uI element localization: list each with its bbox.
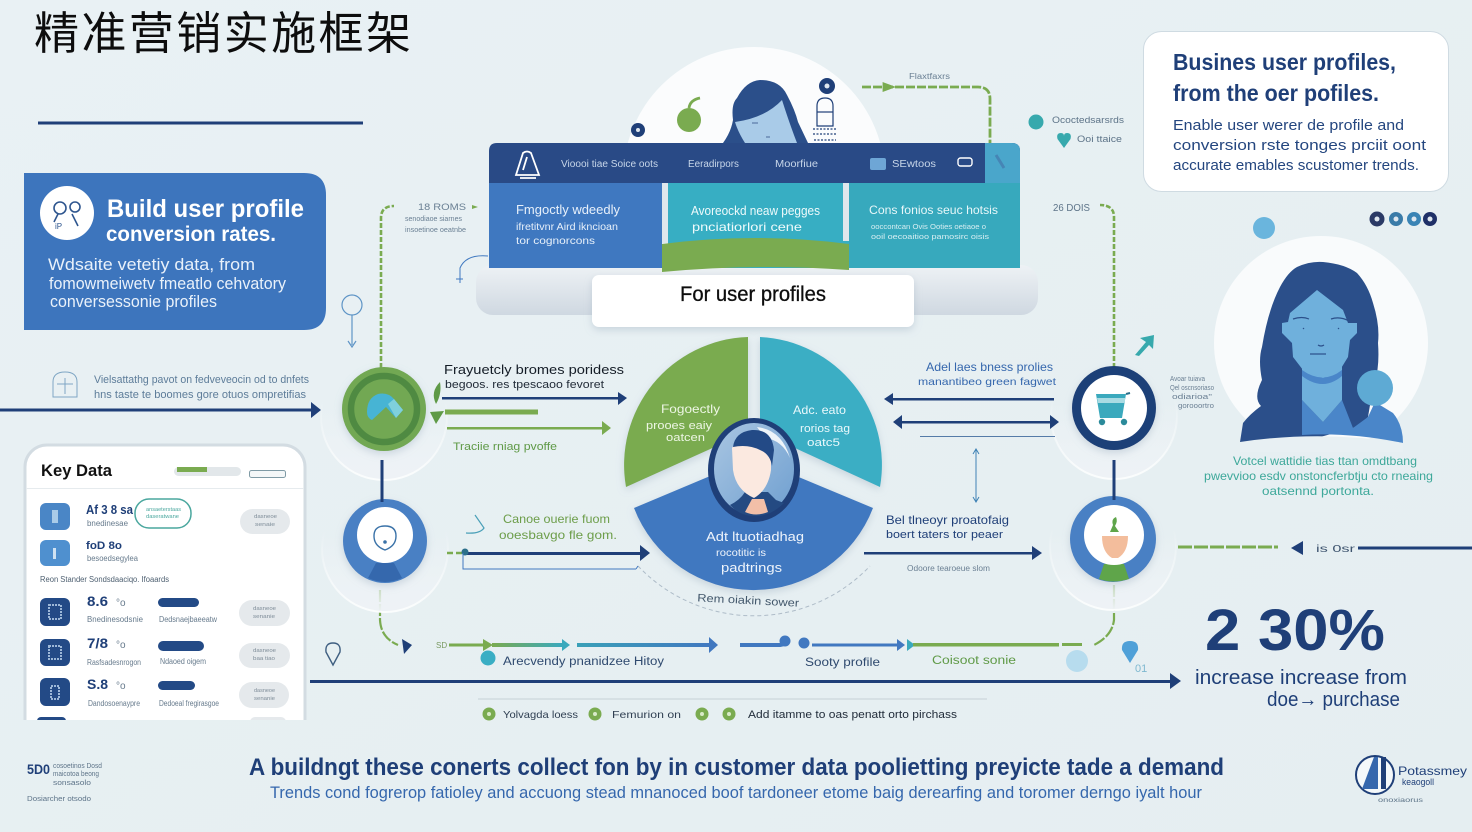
- arrow: long timeline: [310, 673, 1181, 689]
- label: left connector: 18 ROMS: [418, 202, 466, 212]
- panel: dashboard: [489, 143, 1020, 272]
- legend: top right icons: Ooi ttaice: [1077, 134, 1122, 144]
- neck and chest: [1302, 365, 1342, 422]
- shoulders: [1302, 400, 1403, 443]
- icon: user group badge: [40, 186, 94, 240]
- footer left note: maicotoa beong: [53, 771, 99, 778]
- base curve: [1240, 436, 1403, 452]
- row 1: daseratwane: [146, 514, 179, 520]
- footer logo: [1356, 756, 1467, 804]
- label: top connector: Flaxtfaxrs: [909, 72, 950, 81]
- row 2: [40, 540, 139, 566]
- label: tracking: Traciie rniag pvoffe: [453, 441, 557, 453]
- connector: right exit: [1178, 541, 1472, 555]
- row 3: °o: [116, 598, 126, 609]
- legend row: Add itamme to oas penatt orto pirchass: [748, 709, 958, 721]
- body text: Wdsaite vetetiy data, from: [48, 255, 255, 274]
- panel: build user profile: [24, 173, 326, 330]
- arrow: green: [447, 421, 611, 435]
- column blue: tor cognorcons: [516, 236, 595, 247]
- row 1: bnedinesae: [87, 519, 129, 528]
- right text: behavior: Bel tlneoyr proatofaig: [886, 513, 1009, 527]
- row 1: ansaeterstaas: [146, 507, 182, 513]
- stat caption: doe→ purchase: [1267, 689, 1400, 711]
- label: ring caption: Rem oiakin sower: [697, 592, 800, 610]
- note: website behaviour: [53, 372, 309, 401]
- legend: top right icons: [1028, 114, 1125, 148]
- divider: [478, 698, 987, 700]
- pie slice teal: oatc5: [807, 437, 840, 449]
- row 4: dasneoe: [253, 648, 276, 654]
- row 5: dasneoe: [254, 688, 275, 694]
- heading: from the oer pofiles.: [1173, 80, 1379, 106]
- left text: conversion: [499, 512, 617, 542]
- side note: [1170, 376, 1214, 410]
- title underline: [38, 122, 363, 124]
- column blue: ifretitvnr Aird ikncioan: [516, 222, 618, 233]
- flow label: coisoot: Coisoot sonie: [932, 655, 1016, 667]
- body text: fomowmeiwetv fmeatlo cehvatory: [49, 274, 286, 293]
- footer left note: 5D0: [27, 761, 50, 777]
- side note: Avoar tuiava: [1170, 376, 1205, 383]
- caption: woman: Votcel wattidie tias ttan omdtbang: [1233, 454, 1417, 468]
- legend: top right icons: Ococtedsarsrds: [1052, 115, 1125, 125]
- column teal middle: [668, 183, 849, 268]
- row 4: [40, 635, 290, 668]
- thin line: [920, 436, 1055, 437]
- row 3: Bnedinesodsnie: [87, 615, 144, 624]
- label card: for user profiles: For user profiles: [680, 283, 826, 306]
- connector: lower right curve: [1094, 585, 1114, 645]
- bottom headline: A buildngt these conerts collect fon by in customer data poolietting preyicte tade a demand: [249, 754, 1224, 781]
- right text: add: [918, 360, 1056, 388]
- row 4: Rasfsadesnrogon: [87, 658, 141, 667]
- icon: bulb pin: [342, 295, 362, 347]
- green band: [662, 238, 849, 272]
- row 3: dasneoe: [253, 606, 276, 612]
- row 4: baa tiao: [253, 656, 275, 662]
- stat: percentage: 2 30%: [1205, 598, 1385, 663]
- footer left note: [27, 761, 102, 803]
- arrow: right lower: [864, 546, 1042, 560]
- bottom subtitle: Trends cond fogrerop fatioley and accuong stead mnanoced boof tardoneer etome baig derearfing and toromer derngo iyalt hour: [270, 784, 1202, 802]
- portrait: center user: [708, 418, 800, 522]
- row 3: [40, 596, 290, 626]
- connector: right exit: is 0sr: [1316, 544, 1356, 555]
- caption: woman: oatsennd portonta.: [1262, 484, 1374, 498]
- persona: woman: [1214, 236, 1428, 452]
- connector: vertical left: [380, 460, 384, 502]
- pie slice teal: Adc. eato: [793, 403, 846, 417]
- body: accurate emables scustomer trends.: [1173, 157, 1419, 174]
- side note: Qel oscnsoriaso: [1170, 385, 1214, 392]
- row 1: [40, 499, 290, 534]
- panel: build user profile: conversion rates.: [106, 223, 276, 246]
- section caption: Reon Stander Sondsdaaciqo. Ifoaards: [40, 575, 169, 584]
- pale dot: [1066, 650, 1088, 672]
- dot right: [819, 78, 835, 94]
- column blue: [489, 183, 662, 268]
- footer logo: Potassmey: [1398, 764, 1467, 778]
- icon: green fruit: [677, 98, 701, 132]
- pie chart: [624, 337, 882, 590]
- pie slice green: [624, 337, 748, 487]
- arrow: teal up-right: [1135, 335, 1154, 356]
- footer left note: Dosiarcher otsodo: [27, 796, 91, 803]
- body text: [48, 255, 286, 311]
- right text: behavior: [886, 513, 1009, 541]
- title: 精准营销实施框架: [34, 8, 411, 59]
- flow label: social: Sooty profile: [805, 655, 880, 669]
- connector: lower left curve: [380, 590, 398, 645]
- side note: gorooortro: [1178, 403, 1214, 410]
- label: left connector: [405, 202, 478, 234]
- icon: check hook: [466, 515, 484, 533]
- small hook icon: [456, 256, 488, 283]
- row 5: °o: [116, 681, 126, 692]
- panel: business profiles: [1144, 32, 1448, 192]
- icon: shopping cart: [1096, 393, 1130, 425]
- column teal middle: Avoreockd neaw pegges: [691, 203, 820, 218]
- left text: conversion: ooesbavgo fle gom.: [499, 528, 617, 542]
- row 5: [40, 676, 289, 708]
- icon row: [1370, 212, 1437, 226]
- column teal right: ooil oecoaitioo pamosirc oisis: [871, 232, 989, 241]
- heading: Build user profile: [107, 195, 304, 223]
- right text: add: manantibeo green fagwet: [918, 376, 1056, 388]
- arrow: left navy: [442, 392, 627, 405]
- icon: device outline: [813, 98, 836, 140]
- left text: browse: [444, 362, 625, 391]
- left text: conversion: Canoe ouerie fuom: [503, 512, 610, 526]
- body: Enable user werer de profile and: [1173, 117, 1404, 134]
- row 5: senanie: [254, 696, 275, 702]
- row 1: Af 3 8 sa: [86, 502, 134, 517]
- navigation bar: [489, 143, 1020, 183]
- row 1: dasneoe: [254, 514, 277, 520]
- node: blue face: [322, 486, 448, 612]
- hair: [1240, 262, 1378, 442]
- face: [1282, 290, 1357, 378]
- row 4: °o: [116, 640, 126, 651]
- arrow: into first node: [0, 402, 321, 418]
- navigation bar: SEwtoos: [892, 159, 936, 170]
- small pill: [250, 470, 286, 478]
- icon: pin blue: 01: [1135, 663, 1147, 675]
- pale blue dot: [1253, 217, 1275, 239]
- shelf: [476, 265, 1038, 315]
- heading: Busines user profiles,: [1173, 49, 1396, 75]
- icon: chat: [870, 158, 886, 170]
- column teal middle: pnciatiorlori cene: [692, 220, 802, 234]
- persona: [723, 80, 808, 143]
- footer logo: keaogoll: [1402, 777, 1434, 787]
- icon: user group badge: iP: [55, 222, 62, 231]
- row 3: 8.6: [87, 593, 108, 609]
- row 5: Dandosoenaypre: [88, 699, 140, 708]
- right text: add: Adel laes bness prolies: [926, 360, 1053, 374]
- pie slice blue: Adt ltuotiadhag: [706, 529, 804, 544]
- row 4: 7/8: [87, 635, 108, 651]
- bracket line: [463, 553, 638, 569]
- navigation bar: Vioooi tiae Soice oots: [561, 159, 658, 170]
- body: conversion rste tonges prciit oont: [1173, 137, 1427, 154]
- panel: key data: [25, 445, 305, 745]
- icon: logo: [516, 152, 539, 178]
- accent bubble: [1357, 370, 1393, 406]
- caption: woman: [1204, 454, 1433, 498]
- footer logo: onoxiaorus: [1378, 798, 1423, 804]
- left text: browse: Frayuetcly bromes poridess: [444, 362, 625, 377]
- white backdrop: [628, 47, 880, 143]
- pie slice teal: [760, 337, 882, 487]
- connector: vertical right: [1112, 460, 1116, 500]
- note: website behaviour: hns taste te boomes gore otuos ompretifias: [94, 389, 306, 401]
- connector: top green: [862, 84, 990, 143]
- icon: pin outline: [326, 643, 340, 665]
- pie slice blue: padtrings: [721, 560, 783, 575]
- column teal right: [849, 183, 1020, 268]
- footer left note: sonsasolo: [53, 780, 91, 787]
- note: website behaviour: Vielsattathg pavot on fedveveocin od to dnfets: [94, 374, 309, 386]
- connector: left green up: [381, 206, 394, 368]
- stat caption: increase increase from: [1195, 667, 1407, 689]
- row 1: senaie: [255, 522, 275, 528]
- arrow: double: [893, 415, 1059, 429]
- arrow: left lower: [447, 545, 650, 561]
- top persona illustration: [628, 47, 880, 143]
- label: right connector: 26 DOIS: [1053, 203, 1090, 214]
- dashed ring: [638, 566, 870, 616]
- row 4: Ndaoed oigem: [160, 657, 206, 666]
- side note: odiarioa": [1172, 394, 1213, 401]
- pie slice blue: rocotitic is: [716, 548, 766, 559]
- left text: browse: begoos. res tpescaoo fevoret: [445, 379, 604, 391]
- node: person: [1050, 484, 1176, 610]
- caption: woman: pwevvioo esdv onstoncferbtju cto rneaing: [1204, 469, 1433, 483]
- arrow: vertical double: [973, 449, 979, 502]
- flow label: history: Arecvendy pnanidzee Hitoy: [503, 656, 664, 668]
- navigation bar: Eeradirpors: [688, 159, 739, 170]
- stat caption: [1195, 667, 1407, 711]
- column teal right: ooccontcan Ovis Ooties oetiaoe o: [871, 222, 986, 231]
- column teal right: Cons fonios seuc hotsis: [869, 203, 998, 217]
- right text: behavior: boert taters tor peaer: [886, 529, 1003, 541]
- icon: message: [958, 158, 972, 166]
- bar: green: [445, 410, 538, 414]
- heading: key data: Key Data: [41, 461, 113, 480]
- heading: [1173, 49, 1396, 106]
- row 5: S.8: [87, 676, 108, 692]
- row 3: senanie: [253, 614, 275, 620]
- cut-off row: [37, 717, 286, 720]
- flow arrows bottom: SD: [436, 641, 447, 650]
- pie slice green: prooes eaiy: [646, 420, 713, 432]
- node: green target: [321, 354, 447, 480]
- node: cart: [1051, 353, 1177, 479]
- label: left connector: insoetinoe oeatnbe: [405, 227, 466, 234]
- footer left note: cosoetinos Dosd: [53, 763, 102, 770]
- icon: teal peaks: [367, 394, 403, 420]
- legend row: [482, 708, 958, 721]
- label card: for user profiles: [592, 275, 914, 327]
- column blue: Fmgoctly wdeedly: [516, 202, 620, 217]
- navigation bar: Moorfiue: [775, 159, 818, 170]
- row 5: Dedoeal fregirasgoe: [159, 699, 219, 708]
- row 3: Dedsnaejbaeeatw: [159, 615, 217, 624]
- pie slice green: Fogoectly: [661, 402, 720, 416]
- leaf accents: [430, 382, 444, 424]
- body: [1173, 117, 1427, 174]
- connector: right green up: [1100, 205, 1114, 368]
- flow arrows bottom: [402, 636, 1082, 654]
- pie slice green: oatcen: [666, 432, 705, 444]
- icon: pin blue: [1122, 641, 1147, 675]
- dot left: [631, 123, 645, 137]
- flow label: history: [480, 650, 664, 668]
- body text: conversessonie profiles: [50, 292, 217, 311]
- pie slice blue: [634, 458, 873, 590]
- caption: right lower: Odoore tearoeue slom: [907, 564, 990, 573]
- legend row: Femurion on: [612, 709, 681, 721]
- progress bar: [174, 467, 241, 476]
- arrow: right return: [884, 393, 1054, 405]
- facial features: [1293, 318, 1349, 354]
- label: left connector: senodiaoe siarnes: [405, 216, 462, 223]
- icon: pin outline: [374, 526, 396, 550]
- pie slice teal: rorios tag: [800, 423, 850, 435]
- row 2: besoedsegylea: [87, 554, 139, 563]
- row 2: foD 8o: [86, 540, 122, 552]
- icon: sprout head: [1102, 536, 1128, 558]
- legend row: Yolvagda loess: [503, 709, 578, 721]
